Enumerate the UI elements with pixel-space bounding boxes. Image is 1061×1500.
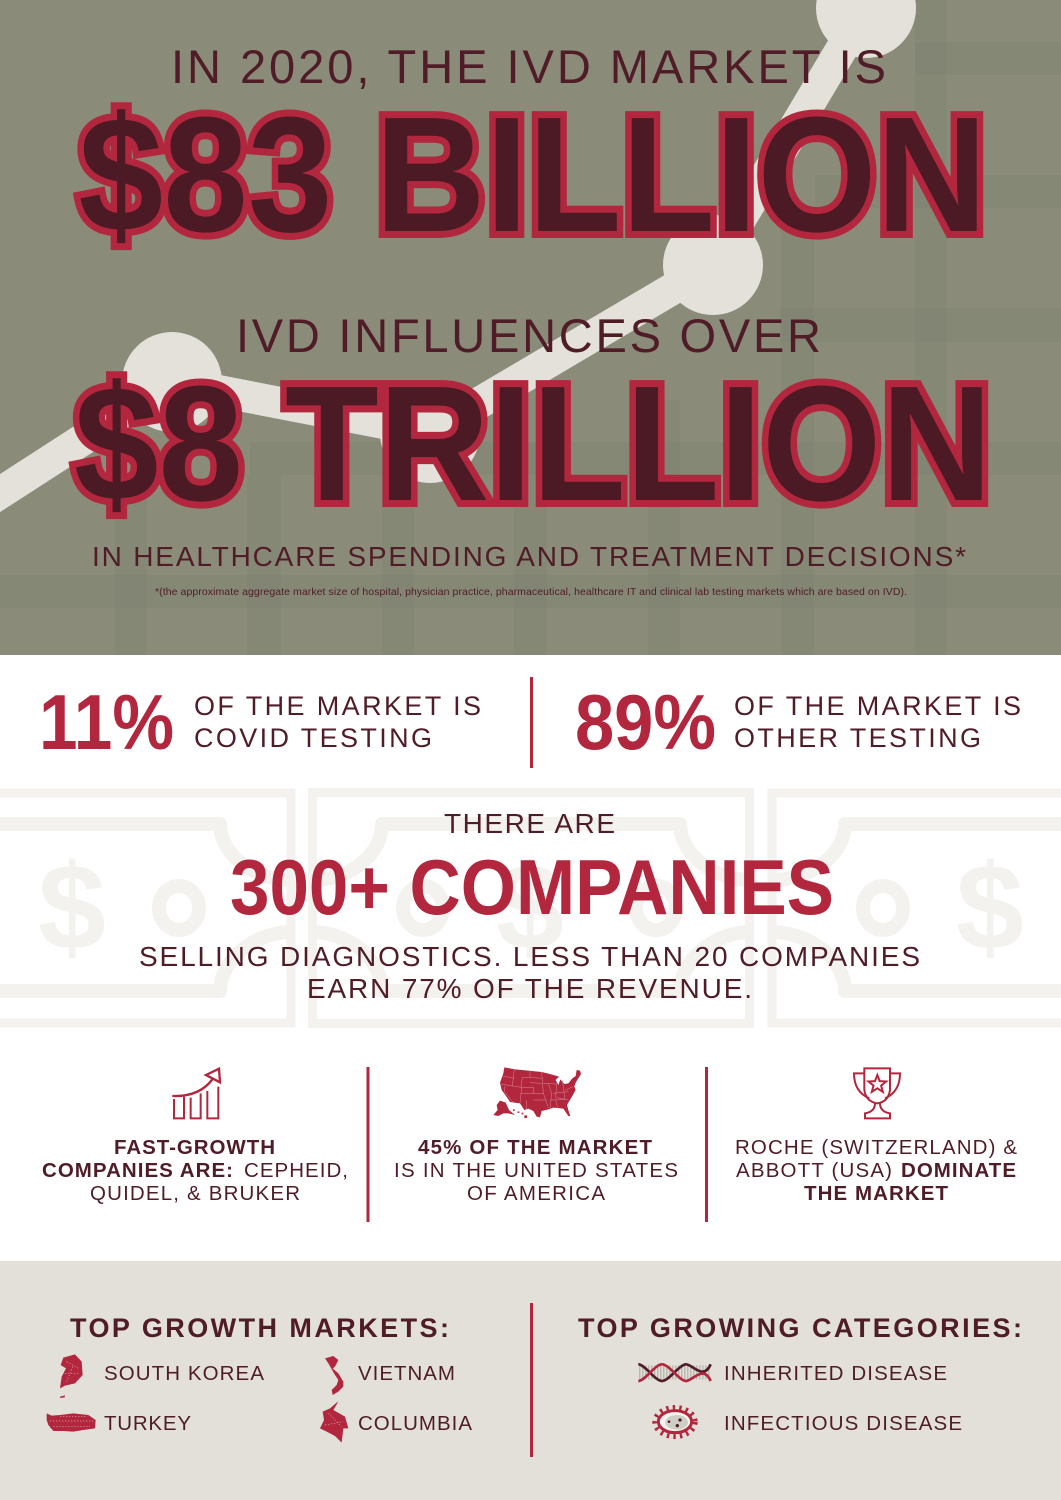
text: selling diagnostics: EARN 77% OF THE REVENUE. [307, 973, 752, 1004]
headline: $8 trillion: TRILLION [285, 352, 992, 535]
heading: top growing categories: TOP GROWING CATEGORIES: [578, 1313, 1022, 1343]
stat: 89 percent other: OF THE MARKET IS [734, 691, 1021, 721]
text: selling diagnostics [139, 941, 920, 1004]
heading: ivd influences: IVD INFLUENCES OVER [236, 309, 821, 362]
panel: growth markets and categories [0, 1261, 1061, 1500]
footnote: *(the approximate aggregate market size of hospital, physician practice, pharmaceutical, healthcare IT and clinical lab testing markets which are based on IVD). [155, 586, 907, 598]
headline: $83 billion: BILLION [375, 83, 987, 266]
market: south korea: SOUTH KOREA [104, 1362, 264, 1385]
column: roche and abbott: DOMINATE [901, 1159, 1016, 1182]
line chart graphic [0, 0, 916, 506]
column: 45 percent united states: IS IN THE UNITED STATES [394, 1159, 678, 1182]
stat: 11 percent covid: 11% [39, 678, 174, 766]
market: turkey: TURKEY [104, 1412, 191, 1435]
market: vietnam [325, 1356, 455, 1395]
column: fast-growth companies: CEPHEID, [244, 1159, 348, 1182]
text: there are: THERE ARE [444, 808, 615, 839]
stat: 89 percent other [575, 678, 1021, 766]
stat: 11 percent covid: COVID TESTING [194, 723, 432, 753]
icon: growth chart [172, 1069, 220, 1118]
headline: 300+ companies: 300+ COMPANIES [230, 843, 834, 931]
headline: $8 trillion: $8 [74, 352, 243, 535]
category: infectious disease [656, 1408, 962, 1436]
icon: trophy [854, 1068, 900, 1118]
panel: market size hero [0, 0, 1061, 655]
market: vietnam: VIETNAM [358, 1362, 455, 1385]
category: inherited disease: INHERITED DISEASE [724, 1362, 947, 1385]
background: dollar bills: $ [38, 839, 106, 975]
headline: $83 billion [78, 83, 987, 266]
column: fast-growth companies: FAST-GROWTH [114, 1136, 275, 1159]
background: dollar bills: $ [496, 839, 564, 975]
market: south korea [60, 1354, 264, 1398]
stat: 11 percent covid: OF THE MARKET IS [194, 691, 481, 721]
column: fast-growth companies: COMPANIES ARE: [42, 1159, 233, 1182]
column: fast-growth companies [42, 1136, 348, 1205]
market: columbia [320, 1402, 472, 1443]
background: dollar bills [0, 792, 1061, 1024]
stat: 89 percent other: OTHER TESTING [734, 723, 981, 753]
column: 45 percent united states [394, 1136, 678, 1205]
market: columbia: COLUMBIA [358, 1412, 472, 1435]
heading: top growth markets: TOP GROWTH MARKETS: [70, 1313, 449, 1343]
column: roche and abbott [735, 1136, 1017, 1205]
column: 45 percent united states: OF AMERICA [467, 1182, 605, 1205]
column: fast-growth companies: QUIDEL, & BRUKER [90, 1182, 300, 1205]
stat: 89 percent other: 89% [575, 678, 716, 766]
column: roche and abbott: ROCHE (SWITZERLAND) & [735, 1136, 1017, 1159]
subheading: healthcare spending: IN HEALTHCARE SPENDING AND TREATMENT DECISIONS* [92, 541, 966, 572]
column: roche and abbott: THE MARKET [804, 1182, 948, 1205]
background: dollar bills: $ [956, 839, 1024, 975]
icon: usa map [493, 1067, 581, 1118]
category: infectious disease: INFECTIOUS DISEASE [724, 1412, 962, 1435]
column: 45 percent united states: 45% OF THE MARKET [418, 1136, 652, 1159]
heading: in 2020: IN 2020, THE IVD MARKET IS [171, 40, 886, 93]
panel: testing share and companies [0, 655, 1061, 1261]
headline: $83 billion: $83 [78, 83, 332, 266]
stat: 11 percent covid [39, 678, 481, 766]
text: selling diagnostics: SELLING DIAGNOSTICS. LESS THAN 20 COMPANIES [139, 941, 920, 972]
column: roche and abbott: ABBOTT (USA) [736, 1159, 892, 1182]
market: turkey [47, 1412, 191, 1435]
